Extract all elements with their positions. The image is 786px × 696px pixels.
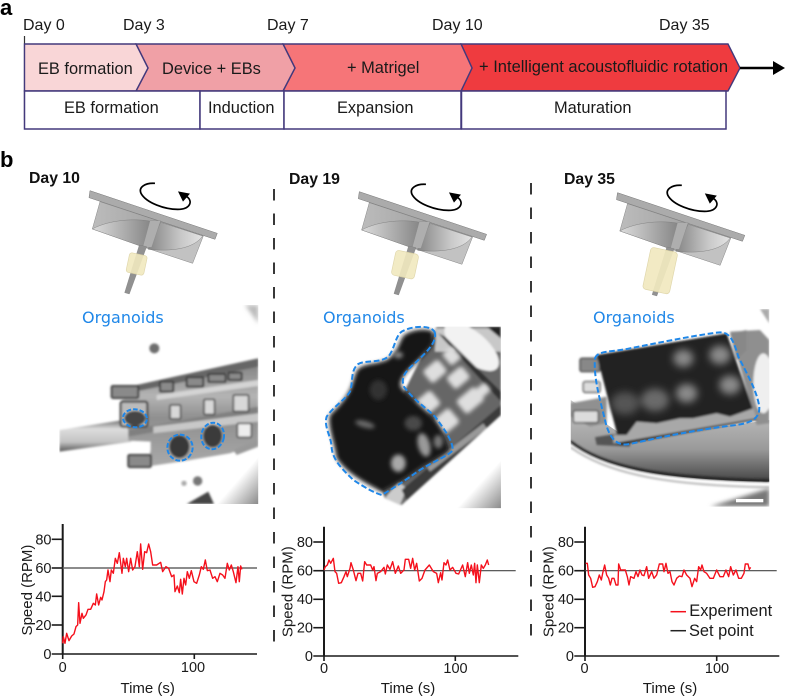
rotation arrow [411, 184, 461, 210]
organoid outline [595, 332, 759, 445]
chevron labels: + Matrigel [347, 59, 419, 77]
chart: day 10 speed: 0 [59, 660, 67, 676]
axis labels: 20 [297, 620, 313, 636]
experiment trace [586, 563, 751, 587]
legend: Experiment [689, 602, 773, 620]
day headings: Day 35 [564, 171, 615, 188]
chart: day 35 speed: 100 [705, 661, 729, 677]
chart: day 10 speed: 100 [181, 660, 205, 676]
device illustration: day 35 [616, 185, 745, 296]
legend: Set point [689, 622, 754, 640]
chart: day 10 speed: Speed (RPM) [19, 545, 36, 635]
axis labels [558, 535, 574, 665]
stage boxes: Maturation [554, 99, 631, 117]
axis labels: 80 [35, 532, 52, 548]
axis labels: 20 [558, 620, 574, 636]
day headings: Day 10 [29, 170, 80, 187]
axis labels [35, 532, 52, 663]
panel letter b: b [0, 147, 13, 172]
chevron labels: EB formation [38, 60, 133, 78]
legend [670, 602, 773, 640]
day labels: Day 0 [23, 17, 65, 34]
chart: day 19 speed: 100 [443, 661, 468, 677]
axis labels: 80 [297, 535, 313, 551]
chevron labels: + Intelligent acoustofluidic rotation [479, 58, 728, 76]
axis labels: 60 [558, 564, 574, 580]
organoid outline [326, 327, 453, 495]
organoid outlines [122, 408, 226, 461]
day labels: Day 7 [267, 17, 309, 34]
arrow: timeline continues [740, 61, 785, 75]
axis labels: 40 [558, 592, 574, 608]
label: organoids day 10: Organoids [82, 308, 164, 327]
device illustration: day 19 [358, 184, 487, 295]
day labels [23, 17, 710, 34]
chart: day 10 speed [19, 524, 257, 696]
label: organoids day 19: Organoids [323, 308, 405, 327]
chevron: device + EBs [136, 44, 295, 91]
chart: day 35 speed [540, 527, 779, 696]
chevron labels [38, 58, 728, 78]
axis labels: 0 [566, 649, 574, 665]
stage boxes: Expansion [337, 99, 414, 117]
axis labels: 20 [35, 618, 52, 634]
rotation arrow [667, 185, 717, 211]
chevron: matrigel [283, 44, 472, 91]
axis labels: 0 [305, 649, 313, 665]
day headings [29, 170, 615, 188]
axis labels: 40 [297, 592, 313, 608]
axis labels [297, 535, 313, 665]
scale bar [736, 499, 763, 502]
stage boxes: Induction [208, 99, 275, 117]
experiment trace [63, 544, 242, 643]
label: organoids day 35: Organoids [593, 308, 675, 327]
day headings: Day 19 [289, 171, 340, 188]
chevron: maturation rotation [461, 44, 740, 91]
day labels: Day 10 [432, 17, 483, 34]
chart: day 35 speed: Speed (RPM) [540, 546, 557, 637]
chart: day 19 speed: 0 [320, 661, 328, 677]
axis labels: 40 [35, 590, 52, 606]
day labels: Day 3 [123, 17, 165, 34]
axis labels: 60 [297, 564, 313, 580]
column dividers [274, 183, 531, 645]
stage boxes [24, 91, 726, 129]
day labels: Day 35 [659, 17, 710, 34]
micrograph: day 19 [324, 326, 501, 508]
axis labels: 80 [558, 535, 574, 551]
axis labels: 60 [35, 561, 52, 577]
rotation arrow [140, 183, 190, 209]
micrograph: day 10 [59, 305, 258, 504]
chevron labels: Device + EBs [162, 60, 261, 78]
chevron: EB formation [24, 44, 148, 91]
device illustration: day 10 [89, 183, 217, 294]
experiment trace [324, 558, 489, 583]
chart: day 35 speed: 0 [580, 661, 589, 677]
battlements [112, 373, 242, 467]
axis labels: 0 [43, 647, 52, 663]
micrograph: day 35 [571, 309, 773, 507]
chart: day 19 speed [280, 527, 518, 696]
stage boxes: EB formation [64, 99, 159, 117]
panel a: timeline [0, 0, 785, 129]
chart: day 19 speed: Speed (RPM) [280, 546, 297, 637]
